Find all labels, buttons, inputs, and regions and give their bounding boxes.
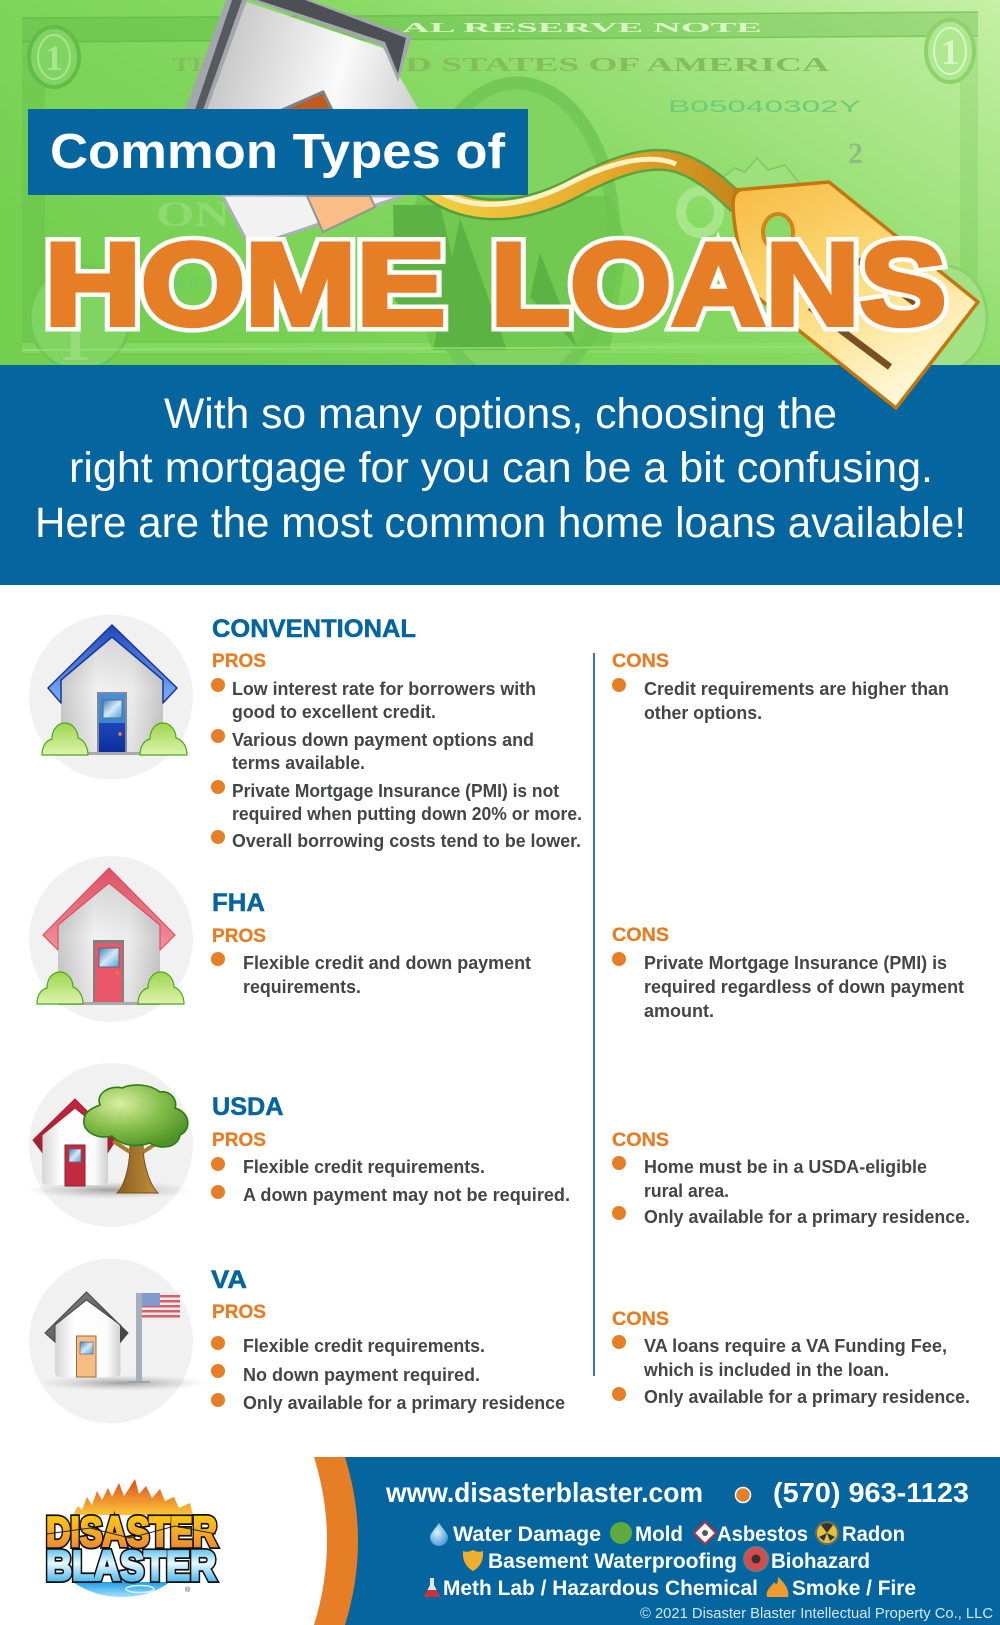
panel: VA pros: PROS — [212, 1302, 266, 1323]
panel: USDA cons: CONS — [612, 1130, 669, 1151]
panel: conventional cons: CONS — [612, 651, 669, 672]
service: meth lab: Meth Lab / Hazardous Chemical — [443, 1576, 758, 1600]
service: mold: Mold — [635, 1522, 683, 1546]
panel: USDA cons — [612, 1130, 970, 1227]
logo: Disaster Blaster: ® — [185, 1586, 191, 1594]
copyright: © 2021 Disaster Blaster Intellectual Property Co., LLC — [640, 1606, 993, 1622]
panel: FHA pros: requirements. — [243, 977, 361, 997]
intro text: right mortgage for you can be a bit confusing. — [69, 444, 933, 492]
service: water damage: Water Damage — [453, 1522, 601, 1546]
panel: FHA pros: FHA — [212, 889, 265, 917]
service: biohazard: Biohazard — [771, 1549, 870, 1573]
panel: VA pros: Flexible credit requirements. — [243, 1336, 485, 1356]
header: dollar bill background: B05040302Y — [668, 97, 861, 116]
header: dollar bill background: ON — [156, 194, 230, 234]
panel: VA cons: CONS — [612, 1309, 669, 1330]
title banner: Common Types of: Common Types of — [50, 125, 506, 179]
center divider — [593, 653, 595, 1376]
panel: FHA cons: required regardless of down payment — [644, 977, 964, 997]
title: HOME LOANS: LOANS — [490, 218, 946, 350]
icon: large tilted house — [185, 0, 420, 247]
header: dollar bill background: D STATES OF AMERICA — [405, 54, 830, 76]
logo: Disaster Blaster: BLASTER — [46, 1542, 216, 1589]
panel: conventional pros: terms available. — [232, 753, 365, 773]
phone: (570) 963-1123 — [773, 1477, 969, 1508]
icon: price tag — [733, 182, 978, 408]
panel: USDA cons: rural area. — [644, 1181, 729, 1201]
panel: conventional pros: CONVENTIONAL — [212, 615, 416, 643]
header: dollar bill background: 2 — [848, 137, 863, 170]
header: dollar bill background: AL RESERVE NOTE — [402, 21, 762, 36]
panel: VA pros: Only available for a primary residence — [243, 1393, 565, 1413]
panel: conventional pros: PROS — [212, 651, 266, 672]
panel: VA pros: No down payment required. — [243, 1365, 480, 1385]
panel: VA cons: Only available for a primary residence. — [644, 1387, 970, 1407]
service: basement waterproofing: Basement Waterproofing — [488, 1549, 737, 1573]
panel: VA cons: VA loans require a VA Funding Fee, — [644, 1336, 947, 1356]
logo: Disaster Blaster: DISASTER — [46, 1508, 217, 1555]
service: radon: Radon — [842, 1522, 905, 1546]
footer contact panel — [314, 1457, 1000, 1625]
panel: USDA pros: Flexible credit requirements. — [243, 1157, 485, 1177]
logo: Disaster Blaster: DISASTER — [46, 1508, 217, 1555]
panel: conventional pros: good to excellent credit. — [232, 702, 436, 722]
icon: biohazard — [744, 1547, 768, 1571]
icon: water drop — [430, 1523, 448, 1546]
panel: conventional cons: Credit requirements are higher than — [644, 679, 949, 699]
icon: mold — [610, 1522, 632, 1544]
panel: FHA pros: Flexible credit and down payment — [243, 953, 531, 973]
title banner: Common Types of — [28, 109, 528, 195]
panel: FHA pros — [211, 889, 531, 997]
panel: FHA cons — [612, 925, 964, 1021]
panel: USDA cons: Home must be in a USDA-eligible — [644, 1157, 927, 1177]
panel: FHA cons: CONS — [612, 925, 669, 946]
panel: USDA cons: Only available for a primary residence. — [644, 1207, 970, 1227]
panel: conventional pros: Various down payment options and — [232, 730, 534, 750]
icon: asbestos — [694, 1522, 716, 1544]
bullet separator — [736, 1488, 750, 1502]
intro band background — [0, 365, 1000, 585]
panel: conventional pros — [211, 615, 582, 851]
panel: FHA cons: Private Mortgage Insurance (PMI) is — [644, 953, 947, 973]
panel: VA cons: which is included in the loan. — [643, 1360, 889, 1380]
icon: USDA house and tree — [26, 1063, 194, 1227]
header: dollar bill background: 1 — [45, 38, 63, 78]
panel: VA cons — [612, 1309, 970, 1407]
intro text: With so many options, choosing the — [164, 390, 837, 438]
icon: ribbon of price tag — [420, 159, 738, 209]
panel: conventional pros: required when putting down 20% or more. — [232, 804, 582, 824]
service: asbestos: Asbestos — [717, 1522, 808, 1546]
panel: conventional pros: Low interest rate for borrowers with — [232, 679, 536, 699]
logo: Disaster Blaster — [46, 1479, 217, 1597]
panel: USDA pros — [211, 1093, 570, 1205]
title: HOME LOANS: HOME — [44, 218, 445, 350]
icon: FHA house — [29, 856, 193, 1022]
title: HOME LOANS: HOME — [44, 218, 445, 350]
icon: flask — [424, 1578, 440, 1597]
panel: VA pros: VA — [211, 1266, 247, 1294]
logo: Disaster Blaster: BLASTER — [46, 1542, 216, 1589]
icon: conventional house — [29, 614, 193, 780]
title: HOME LOANS: LOANS — [490, 218, 946, 350]
panel: USDA pros: USDA — [212, 1093, 284, 1121]
panel: FHA cons: amount. — [644, 1001, 714, 1021]
panel: conventional cons — [612, 651, 949, 723]
header: dollar bill background: 1 — [58, 302, 91, 375]
panel: VA pros — [211, 1266, 565, 1413]
icon: VA house and flag — [29, 1258, 208, 1424]
icon: radon — [816, 1522, 838, 1544]
service: smoke and fire: Smoke / Fire — [792, 1576, 916, 1600]
header: dollar bill background — [0, 0, 1000, 387]
intro text — [35, 390, 966, 547]
header: dollar bill background: TI — [172, 54, 202, 76]
panel: USDA pros: A down payment may not be required. — [243, 1185, 570, 1205]
intro text: Here are the most common home loans available! — [35, 499, 966, 547]
panel: conventional cons: other options. — [644, 703, 762, 723]
panel: conventional pros: Private Mortgage Insurance (PMI) is not — [232, 781, 559, 801]
panel: FHA pros: PROS — [212, 926, 266, 947]
panel: conventional pros: Overall borrowing costs tend to be lower. — [232, 831, 581, 851]
header: dollar bill background: B05 — [172, 273, 214, 292]
icon: fire — [767, 1577, 788, 1597]
icon: shield — [463, 1550, 483, 1571]
title: HOME LOANS — [44, 218, 946, 350]
panel: USDA pros: PROS — [212, 1130, 266, 1151]
website: www.disasterblaster.com — [385, 1477, 703, 1508]
header: dollar bill background: 1 — [941, 32, 959, 72]
